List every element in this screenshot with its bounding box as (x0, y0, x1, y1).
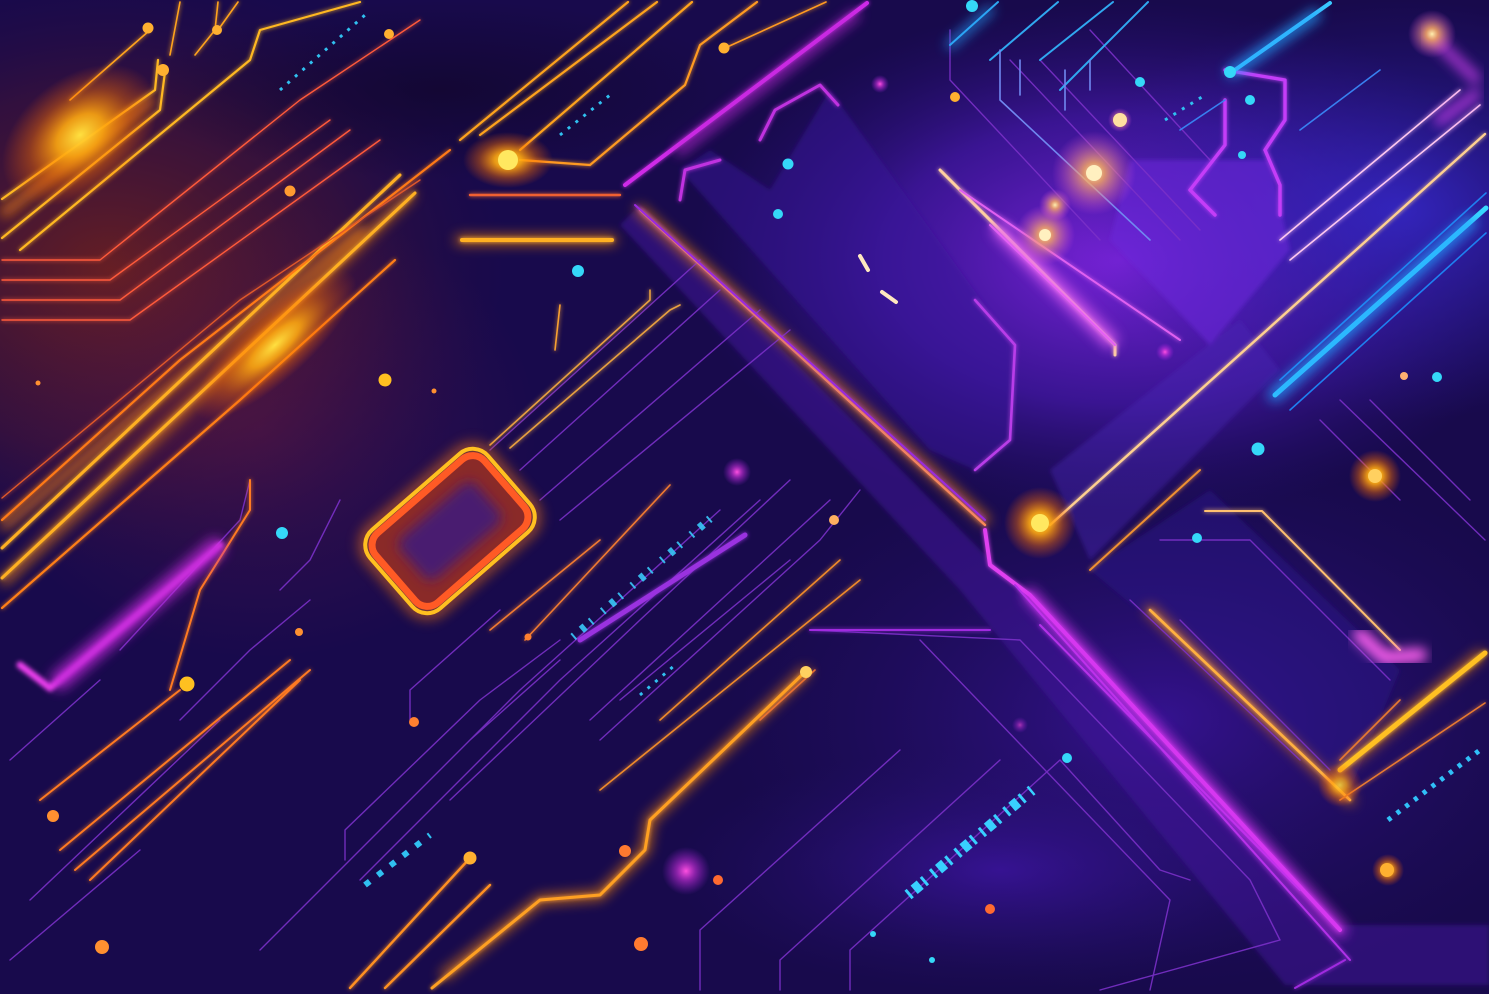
glow: pale lights upper right (1015, 10, 1456, 886)
traces: magenta lines (580, 3, 1350, 988)
glow: amber streak left (174, 249, 376, 441)
glow: magenta spots (662, 75, 1174, 895)
data ticks: cyan dashes centre (573, 517, 712, 637)
data ticks: small cyan dotted rows (280, 15, 1205, 885)
traces: cyan and blue lines (950, 2, 1486, 410)
data ticks: cyan dashes right (1388, 750, 1480, 820)
glow: central junction spot (1004, 487, 1076, 559)
data ticks: cyan dashes bottom (908, 790, 1032, 895)
panel: raised purple bands (620, 90, 1489, 985)
glow: large amber hot spot top left (0, 35, 185, 235)
highlight: short bright dashes on the diagonal (860, 256, 896, 302)
chip: rounded orange processor outline (357, 441, 543, 621)
glow: junction spot top centre (463, 132, 553, 188)
cyan glow behind right-hand bars (950, 10, 1470, 395)
nodes: cyan dots (276, 0, 1442, 963)
